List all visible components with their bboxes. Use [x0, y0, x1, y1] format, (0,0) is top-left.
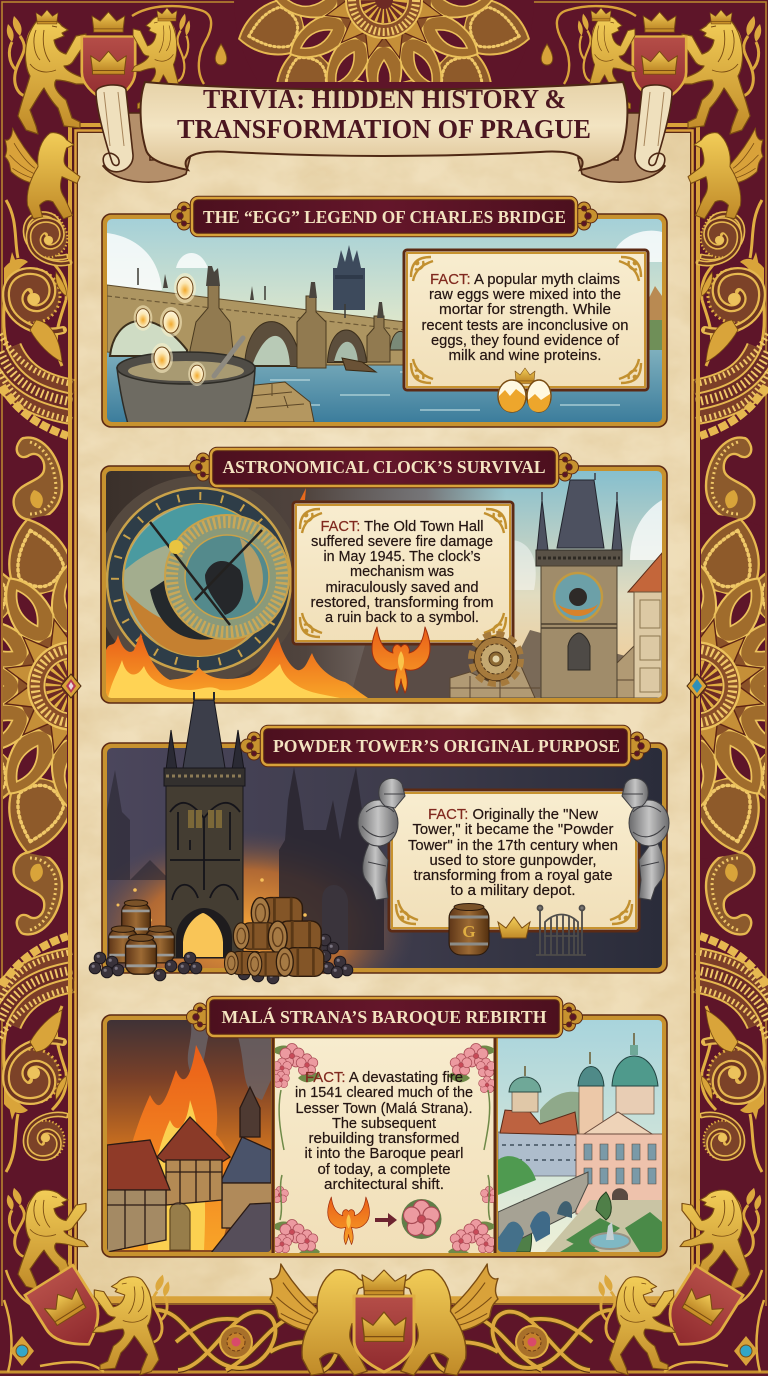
garden	[545, 1200, 662, 1252]
fact text: milk and wine proteins.	[448, 348, 602, 364]
bottom ornament left half	[0, 1188, 384, 1376]
fact column	[272, 1038, 496, 1253]
fact text: used to store gunpowder,	[430, 853, 596, 869]
fact card	[404, 250, 648, 412]
scroll right	[578, 85, 672, 182]
fact text: recent tests are inconclusive on	[422, 318, 628, 334]
central crest	[354, 1270, 414, 1372]
fact text: rebuilding transformed	[308, 1131, 460, 1147]
fact text: The subsequent	[332, 1116, 436, 1132]
floral corners	[272, 1044, 497, 1258]
bridge	[107, 285, 405, 365]
scene: baroque town	[498, 1020, 664, 1252]
section heading	[186, 998, 582, 1036]
top mandala ornament	[234, 0, 534, 82]
section heading: THE “EGG” LEGEND OF CHARLES BRIDGE	[203, 207, 566, 227]
right buildings	[650, 286, 662, 320]
fact text: FACT: A devastating fire	[305, 1070, 463, 1086]
fact text: restored, transforming from	[310, 595, 494, 611]
astronomical clock	[106, 476, 292, 680]
section heading	[240, 727, 650, 765]
section heading	[170, 198, 598, 235]
icon: gunpowder barrel	[449, 904, 489, 955]
icon: pendant drops	[215, 44, 553, 65]
title banner	[96, 82, 672, 182]
bottom ornament right half	[384, 1188, 768, 1376]
panel: Charles Bridge egg legend	[102, 198, 667, 427]
arrow	[375, 1213, 397, 1227]
fact text: raw eggs were mixed into the	[429, 287, 621, 303]
houses	[107, 1087, 272, 1253]
scroll left	[96, 85, 190, 182]
title text: TRIVIA: HIDDEN HISTORY &	[203, 84, 566, 114]
fact card	[389, 790, 639, 931]
panel: Astronomical clock survival	[95, 449, 667, 703]
fact text: FACT: The Old Town Hall	[320, 519, 484, 535]
scene: bridge over river	[107, 219, 662, 424]
barrels and cannonballs right	[224, 898, 353, 984]
fact text: mortar for strength. While	[439, 302, 611, 318]
title text	[177, 84, 591, 144]
top-left heraldic lions and griffin	[5, 6, 211, 264]
fact text: eggs, they found evidence of	[431, 333, 620, 349]
icon: gear	[471, 634, 521, 684]
gem: turquoise right	[687, 674, 707, 698]
ribbon	[141, 82, 627, 170]
fact card	[293, 502, 513, 644]
mortar pot	[117, 368, 255, 424]
fact text: transforming from a royal gate	[414, 868, 612, 884]
scene: burning town	[107, 1020, 272, 1253]
icon: gold crown	[498, 917, 530, 938]
fact text: in May 1945. The clock’s	[324, 549, 480, 565]
section heading: ASTRONOMICAL CLOCK’S SURVIVAL	[222, 457, 546, 477]
icon: phoenix	[328, 1197, 369, 1245]
barrels and cannonballs left	[89, 900, 202, 981]
fact text: Tower," it became the "Powder	[412, 822, 614, 838]
knight right	[622, 778, 669, 900]
fact text: FACT: Originally the "New	[428, 807, 599, 823]
fact text: suffered severe fire damage	[311, 534, 493, 550]
scene: dark city	[107, 748, 662, 968]
scene: clock, fire and tower	[95, 462, 662, 698]
fact text: FACT: A popular myth claims	[430, 272, 620, 288]
fact text: architectural shift.	[324, 1177, 444, 1193]
right ornamental border column	[443, 200, 768, 1172]
right house	[628, 553, 662, 698]
title text: TRANSFORMATION OF PRAGUE	[177, 114, 591, 144]
gem: ruby left	[61, 674, 81, 698]
stone bridge	[498, 1172, 588, 1250]
panel: Powder Tower	[88, 692, 670, 984]
flames	[106, 488, 368, 698]
panel: Mala Strana rebirth	[102, 998, 667, 1258]
fact text	[310, 519, 494, 626]
fact text: miraculously saved and	[326, 580, 478, 596]
left ornamental border column	[0, 200, 325, 1172]
far tower	[333, 245, 365, 310]
icon: phoenix	[372, 627, 430, 693]
section heading: POWDER TOWER’S ORIGINAL PURPOSE	[273, 736, 620, 756]
fact text	[295, 1070, 473, 1193]
fact text	[422, 272, 628, 364]
fact text: to a military depot.	[450, 883, 576, 899]
knight left	[358, 778, 405, 900]
fact text: a ruin back to a symbol.	[325, 610, 479, 626]
eggs	[174, 273, 196, 303]
parchment page	[70, 125, 698, 1303]
fact text	[408, 807, 618, 899]
fact text: in 1541 cleared much of the	[295, 1085, 473, 1101]
fact text: Tower" in the 17th century when	[408, 838, 618, 854]
town hall tower	[536, 473, 622, 698]
fact text: of today, a complete	[318, 1162, 450, 1178]
fact text: it into the Baroque pearl	[304, 1146, 464, 1162]
icon: gunpowder barrel: G	[462, 922, 476, 941]
silhouettes	[107, 767, 384, 950]
icon: iron gate	[536, 906, 586, 955]
fact text: Lesser Town (Malá Strana).	[296, 1101, 472, 1117]
icon: flower	[402, 1199, 442, 1239]
section heading: MALÁ STRANA’S BAROQUE REBIRTH	[222, 1007, 547, 1027]
section heading	[190, 449, 578, 486]
powder tower	[164, 692, 245, 958]
fact text: mechanism was	[350, 564, 454, 580]
icon: crown and eggs	[498, 368, 551, 412]
rubble	[240, 382, 314, 422]
top-right heraldic lions and griffin	[557, 6, 763, 264]
